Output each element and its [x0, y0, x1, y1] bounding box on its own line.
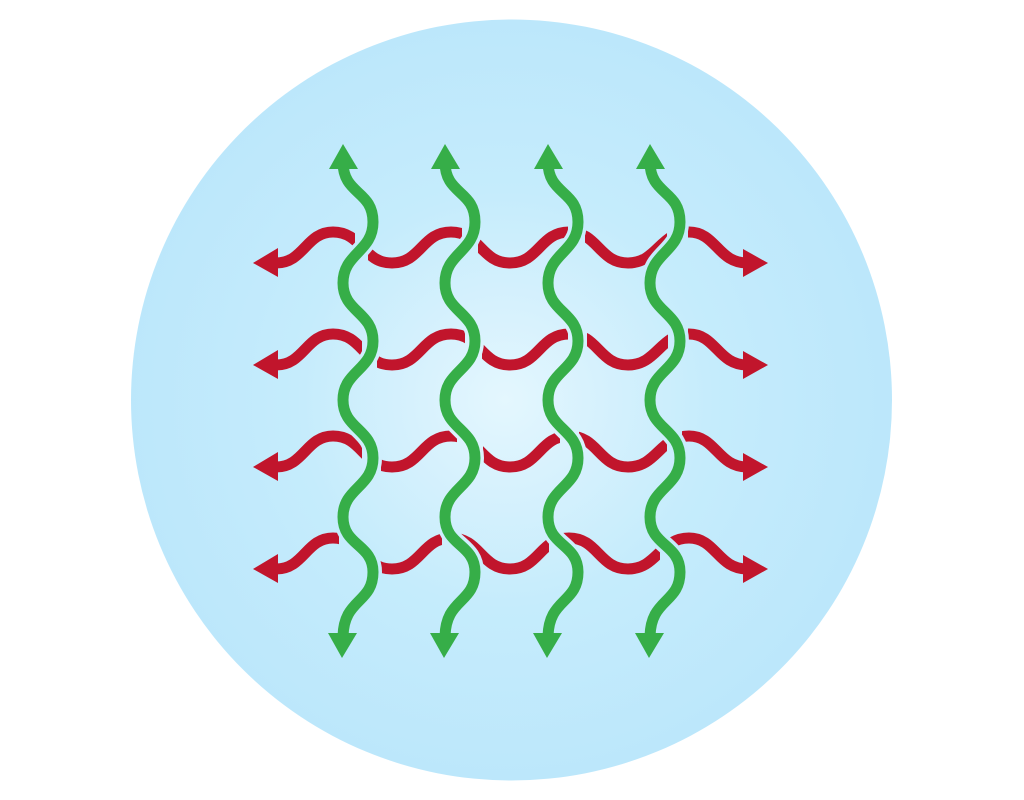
red arrow row 3: [253, 436, 768, 481]
red arrow row 4: [253, 538, 768, 583]
red arrow row 1: [253, 232, 768, 277]
green vertical wavy arrows: [328, 144, 680, 658]
red arrow row 2: [253, 334, 768, 379]
green arrow column 2: [430, 144, 475, 658]
green arrow column 3: [533, 144, 578, 658]
green arrow column 1: [328, 144, 373, 658]
green arrow column 4: [635, 144, 680, 658]
red horizontal wavy arrows: [253, 232, 768, 583]
background circle: [131, 20, 892, 780]
